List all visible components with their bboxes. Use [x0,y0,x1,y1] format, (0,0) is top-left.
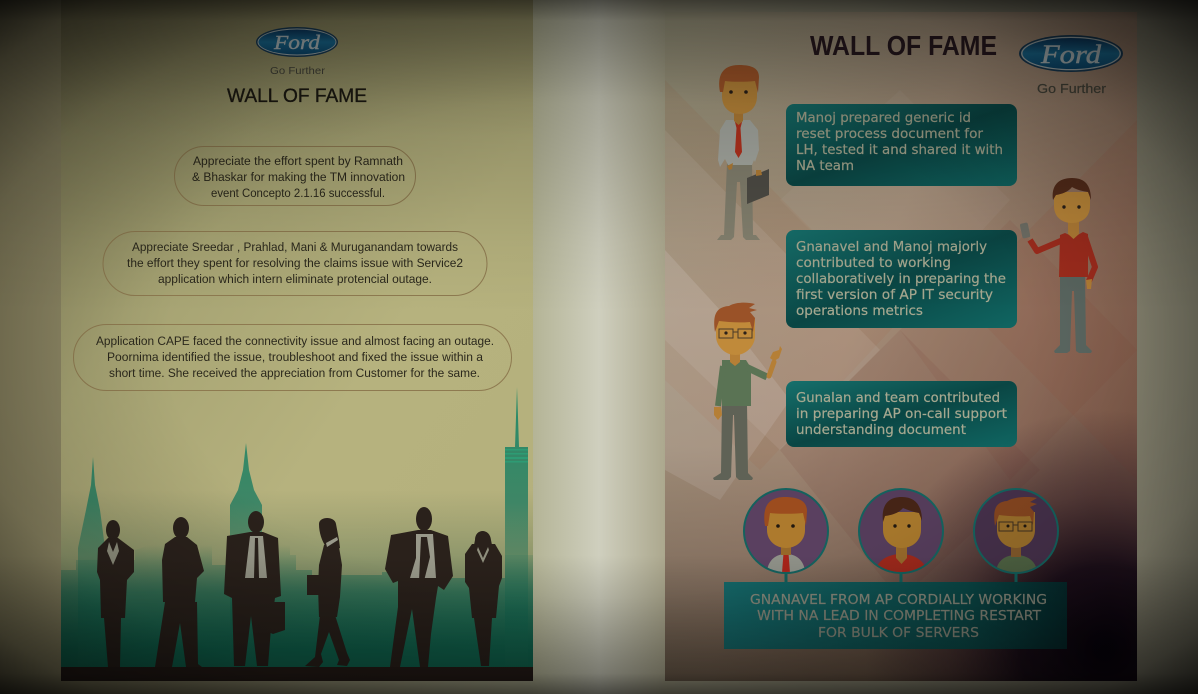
silhouette: woman in coat [97,520,134,667]
text box: Gnanavel and Manoj: Gnanavel and Manoj majorly [796,240,987,255]
text box: Manoj: reset process document for [796,127,984,142]
callout: Ramnath and Bhaskar [174,146,416,206]
banner: Gnanavel restart: WITH NA LEAD IN COMPLETING RESTART [757,609,1041,624]
banner: Gnanavel restart: GNANAVEL FROM AP CORDIALLY WORKING [750,593,1047,608]
avatar: man with glasses [974,489,1058,573]
figure: man with glasses waving [713,303,782,480]
text box: Gunalan: Gunalan and team contributed [796,391,1000,406]
text box: Manoj: LH, tested it and shared it with [796,143,1003,158]
silhouette: woman walking [305,518,350,667]
tagline: Go Further left: Go Further [270,65,326,77]
text box: Gunalan [786,381,1017,447]
figure: man with phone [1020,178,1095,353]
logo: Ford oval right: Ford [1040,40,1102,69]
callout: Service2 claims issue [103,232,487,296]
silhouette: man hands in pockets [385,507,453,667]
silhouette: woman arms crossed [465,531,502,666]
heading: wall of fame right: WALL OF FAME [810,30,997,61]
silhouette: man with briefcase [224,511,285,666]
connector stems [784,573,1018,583]
callout: Ramnath and Bhaskar: event Concepto 2.1.16 successful. [211,186,385,200]
callout: CAPE connectivity: Application CAPE faced the connectivity issue and almost facing an outage. [96,334,494,348]
silhouette: man arms crossed [155,517,204,667]
text box: Gunalan: in preparing AP on-call support [796,407,1007,422]
avatars row [744,489,1058,583]
text box: Manoj: Manoj prepared generic id [796,111,971,126]
ground strip [61,667,533,681]
text box: Manoj [786,104,1017,186]
avatar: man in red [859,489,943,573]
text box: Gnanavel and Manoj [786,230,1017,328]
heading: wall of fame left: WALL OF FAME [227,85,367,107]
avatar: man with tie [744,489,828,573]
logo: Ford oval left: Ford [273,32,321,54]
text box: Gnanavel and Manoj: first version of AP IT security [796,288,993,303]
banner: Gnanavel restart [724,582,1067,649]
text box: Gnanavel and Manoj: collaboratively in preparing the [796,272,1006,287]
panel: right poster [665,12,1137,681]
text box: Gunalan: understanding document [796,423,966,438]
panel: left poster [61,0,533,681]
callout: CAPE connectivity: short time. She received the appreciation from Customer for the same. [109,366,480,380]
callout: Service2 claims issue: application which intern eliminate protencial outage. [158,272,432,286]
city skyline [61,387,533,667]
callout: Ramnath and Bhaskar: & Bhaskar for making the TM innovation [192,170,405,184]
diamond background [665,12,1137,681]
banner: Gnanavel restart: FOR BULK OF SERVERS [818,626,979,641]
callout: CAPE connectivity: Poornima identified the issue, troubleshoot and fixed the issue within a [107,350,483,364]
callout: Service2 claims issue: Appreciate Sreedar , Prahlad, Mani & Muruganandam towards [132,240,458,254]
poster background [61,0,533,681]
callout: Ramnath and Bhaskar: Appreciate the effort spent by Ramnath [193,154,403,168]
text box: Manoj: NA team [796,159,854,174]
callout: CAPE connectivity [74,324,512,390]
figure: man with briefcase [717,65,769,240]
poster top shade [61,0,533,681]
callout: Service2 claims issue: the effort they spent for resolving the claims issue with Service2 [127,256,463,270]
logo: Ford oval right [1019,35,1123,72]
text box: Gnanavel and Manoj: contributed to working [796,256,951,271]
logo: Ford oval left [256,27,338,57]
tagline: Go Further right: Go Further [1037,82,1106,96]
text box: Gnanavel and Manoj: operations metrics [796,304,923,319]
